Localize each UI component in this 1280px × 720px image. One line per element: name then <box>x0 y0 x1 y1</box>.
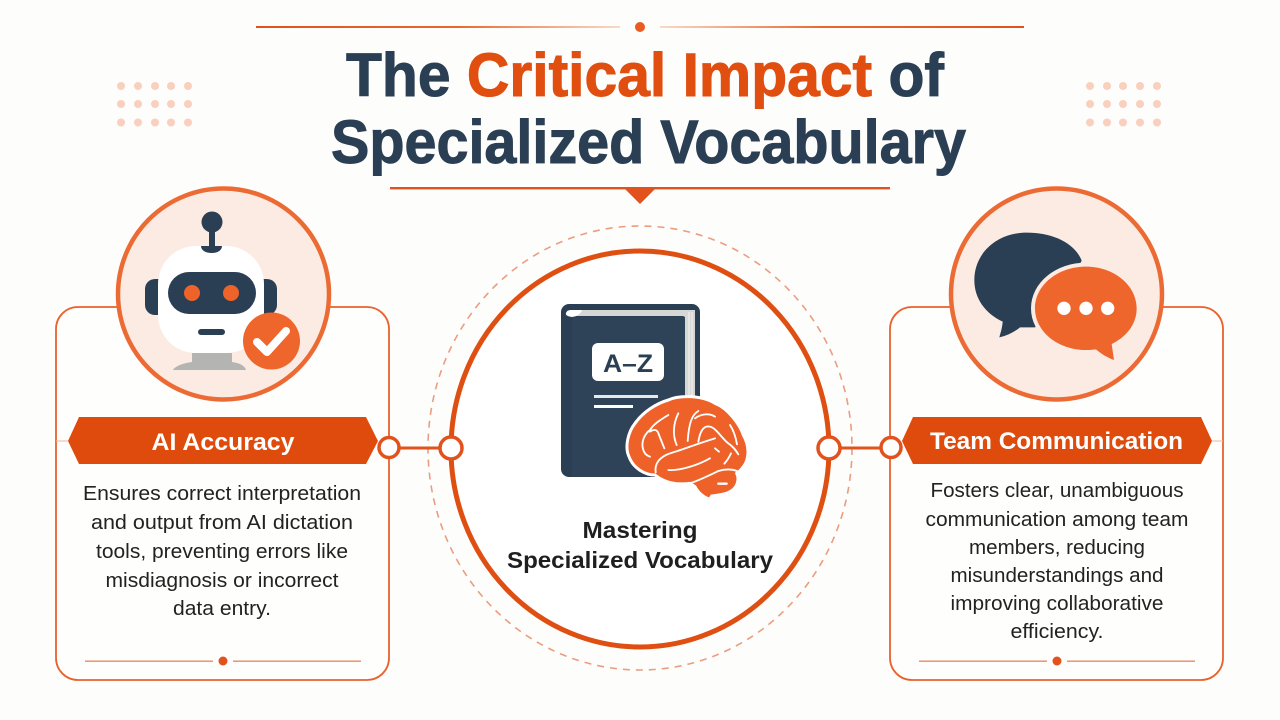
text block: AI Accuracy description <box>83 483 361 620</box>
center circle <box>451 251 829 647</box>
text block: Team Communication description: improving collaborative <box>950 593 1164 615</box>
text block: Team Communication description: communication among team <box>926 509 1188 531</box>
text block: Team Communication description <box>926 480 1188 643</box>
book <box>561 304 700 477</box>
ribbon: Team Communication heading <box>902 417 1223 464</box>
text block: AI Accuracy description: tools, preventing errors like <box>96 541 348 563</box>
dot pattern left <box>117 82 192 126</box>
text block: AI Accuracy description: and output from AI dictation <box>91 512 353 534</box>
ribbon: AI Accuracy heading: AI Accuracy <box>152 429 295 456</box>
title: The Critical Impact of <box>346 41 945 109</box>
brain <box>627 397 748 499</box>
panel: AI Accuracy <box>56 307 389 680</box>
text block: Team Communication description: misunderstandings and <box>950 565 1164 587</box>
text block: AI Accuracy description: misdiagnosis or incorrect <box>106 570 339 592</box>
text block: Team Communication description: Fosters clear, unambiguous <box>930 480 1184 502</box>
book: A–Z <box>603 350 653 378</box>
text block: AI Accuracy description: Ensures correct interpretation <box>83 483 361 505</box>
text block: Team Communication description: members, reducing <box>969 537 1145 559</box>
connector: right <box>818 437 901 459</box>
text block: Team Communication description: efficiency. <box>1010 621 1104 643</box>
center label: Mastering <box>582 517 698 543</box>
dot pattern right <box>1086 82 1161 126</box>
icon: speech bubbles <box>951 188 1162 400</box>
text block: AI Accuracy description: data entry. <box>173 598 271 620</box>
panel border <box>56 307 389 680</box>
panel: Team Communication <box>890 307 1223 680</box>
ribbon: AI Accuracy heading <box>56 417 378 464</box>
center label <box>507 517 773 573</box>
icon: dictionary book with brain <box>561 304 748 499</box>
title underline with pointer <box>390 187 890 204</box>
top ornament <box>256 22 1024 32</box>
panel border <box>890 307 1223 680</box>
icon: robot with check badge <box>118 188 329 400</box>
title <box>331 41 966 176</box>
ribbon: Team Communication heading: Team Communication <box>930 428 1183 455</box>
panel footer ornament <box>919 656 1195 666</box>
center dashed ring <box>428 226 852 670</box>
connector: left <box>379 437 462 459</box>
title: Specialized Vocabulary <box>331 108 966 176</box>
center label: Specialized Vocabulary <box>507 547 773 573</box>
panel footer ornament <box>85 656 361 666</box>
